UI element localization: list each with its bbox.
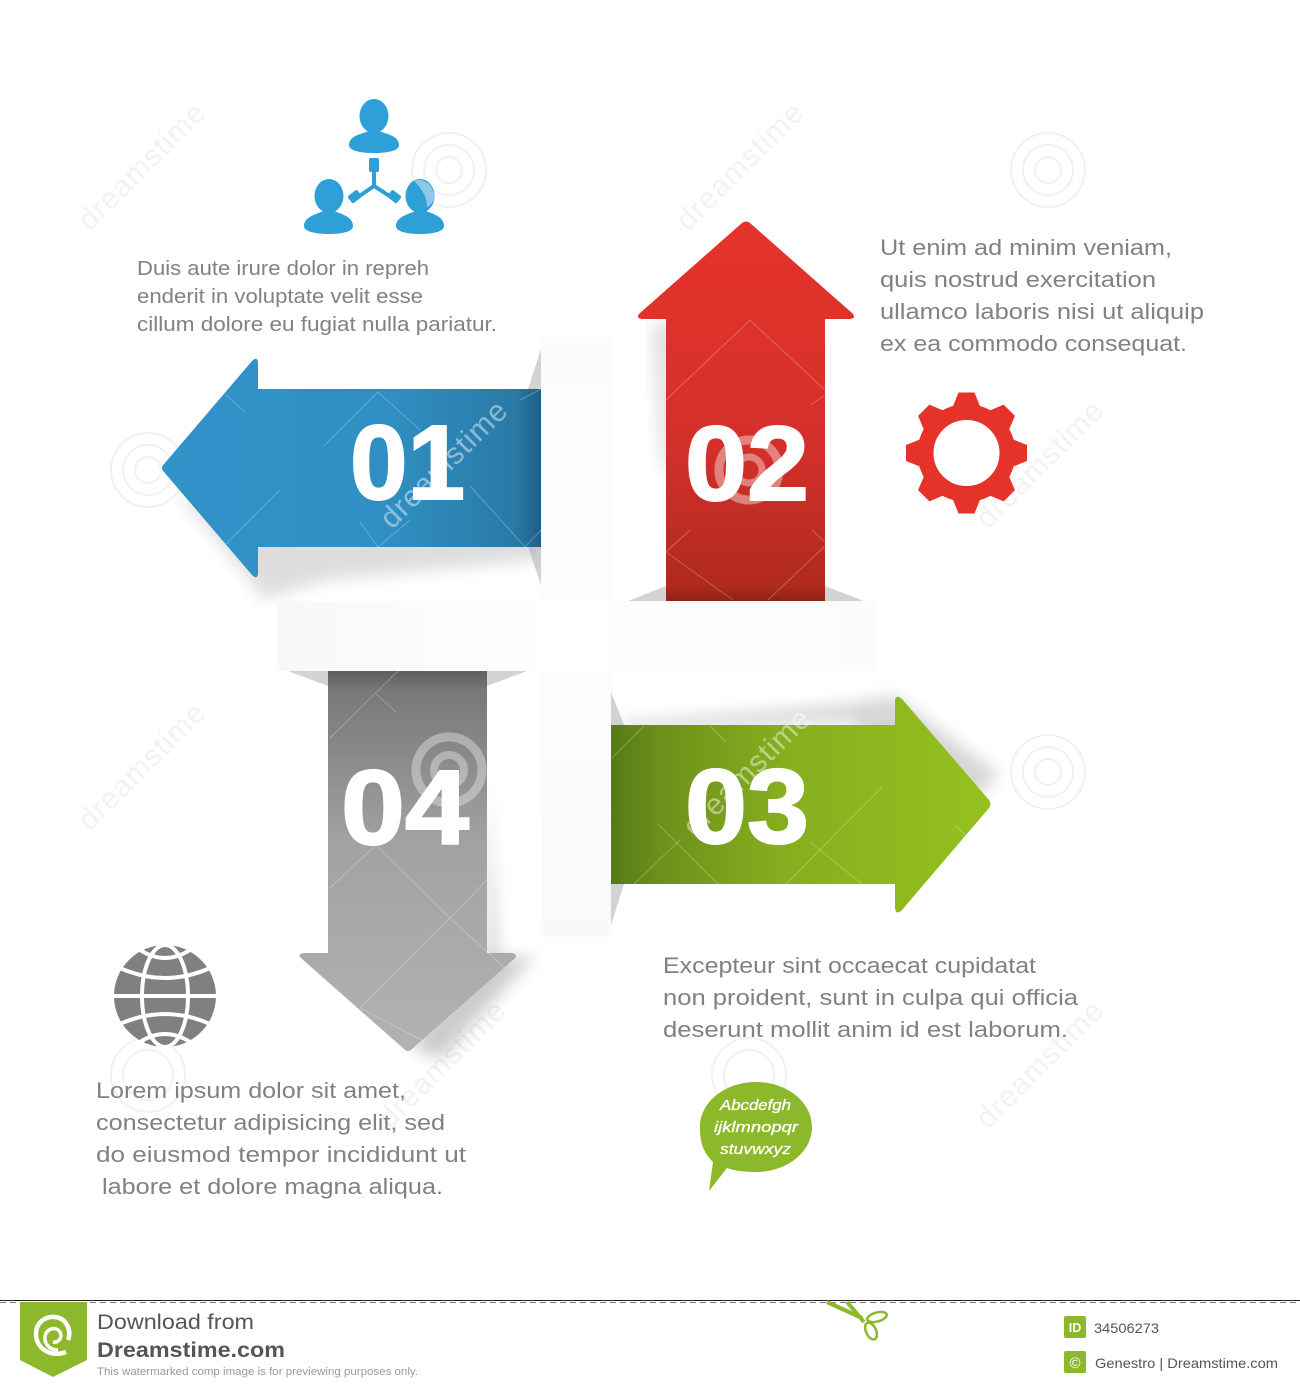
text block: top right	[880, 235, 1204, 356]
arrow 02: red, up: 02	[685, 405, 809, 523]
watermark spirals and text: dreamstime	[72, 696, 213, 837]
watermark spirals and text: dreamstime	[670, 96, 811, 237]
footer: download text	[97, 1310, 418, 1378]
icon: speech bubble: Abcdefgh	[719, 1098, 791, 1114]
white paper bands	[277, 337, 876, 937]
arrow 03: green, right: 03	[685, 748, 809, 866]
arrow 01: blue, left	[162, 359, 541, 577]
text block: bottom left: consectetur adipisicing elit, sed	[96, 1110, 445, 1135]
text block: top left: enderit in voluptate velit esse	[137, 285, 423, 308]
arrow 01: blue, left: dreamstime	[374, 394, 515, 535]
footer cut line	[0, 1300, 1300, 1302]
footer: copyright badge	[1064, 1351, 1278, 1373]
text block: top left: cillum dolore eu fugiat nulla pariatur.	[137, 313, 497, 336]
arrow 02: red, up	[638, 222, 854, 601]
footer: download text: Dreamstime.com	[97, 1338, 285, 1362]
text block: top right: ullamco laboris nisi ut aliquip	[880, 299, 1204, 324]
text block: top right: Ut enim ad minim veniam,	[880, 235, 1172, 260]
footer: download text: This watermarked comp image is for previewing purposes only.	[97, 1366, 418, 1378]
arrow 03: green, right	[611, 697, 990, 913]
text block: bottom left: labore et dolore magna aliqua.	[102, 1174, 443, 1199]
footer: scissors icon	[827, 1302, 888, 1341]
icon: gear	[906, 392, 1027, 514]
icon: speech bubble: stuvwxyz	[720, 1142, 792, 1158]
footer: copyright badge: Genestro | Dreamstime.com	[1095, 1355, 1278, 1371]
text block: bottom left	[96, 1078, 467, 1199]
band creases shadows	[288, 349, 864, 925]
text block: bottom right: non proident, sunt in culpa qui officia	[663, 985, 1079, 1010]
arrow 04: gray, down	[299, 671, 516, 1051]
arrow 04: gray, down: 04	[341, 749, 469, 867]
footer: copyright badge: ©	[1069, 1355, 1081, 1372]
footer: download text: Download from	[97, 1310, 254, 1334]
watermark spirals and text: dreamstime	[72, 96, 213, 237]
text block: top left	[137, 257, 497, 336]
text block: top left: Duis aute irure dolor in repreh	[137, 257, 429, 280]
text block: top right: ex ea commodo consequat.	[880, 331, 1187, 356]
watermark spirals and text: dreamstime	[970, 994, 1111, 1135]
icon: people network	[304, 99, 444, 234]
text block: top right: quis nostrud exercitation	[880, 267, 1156, 292]
text block: bottom right	[663, 953, 1079, 1042]
icon: speech bubble	[700, 1082, 812, 1191]
text block: bottom left: Lorem ipsum dolor sit amet,	[96, 1078, 406, 1103]
footer: ID badge	[1064, 1316, 1159, 1338]
text block: bottom right: Excepteur sint occaecat cupidatat	[663, 953, 1037, 978]
footer: dreamstime badge	[20, 1302, 87, 1377]
arrow shadows	[175, 320, 1000, 1060]
icon: globe	[114, 945, 216, 1047]
arrow 03: green, right: dreamstime	[677, 702, 818, 843]
icon: speech bubble: ijklmnopqr	[714, 1120, 799, 1136]
watermark spirals and text	[72, 96, 1111, 1135]
arrow 01: blue, left: 01	[350, 404, 465, 522]
text block: bottom left: do eiusmod tempor incididunt ut	[96, 1142, 467, 1167]
text block: bottom right: deserunt mollit anim id est laborum.	[663, 1017, 1068, 1042]
watermark spirals and text: dreamstime	[970, 394, 1111, 535]
footer: ID badge: ID	[1069, 1321, 1081, 1335]
footer: ID badge: 34506273	[1094, 1320, 1159, 1336]
watermark spirals and text: dreamstime	[372, 994, 513, 1135]
